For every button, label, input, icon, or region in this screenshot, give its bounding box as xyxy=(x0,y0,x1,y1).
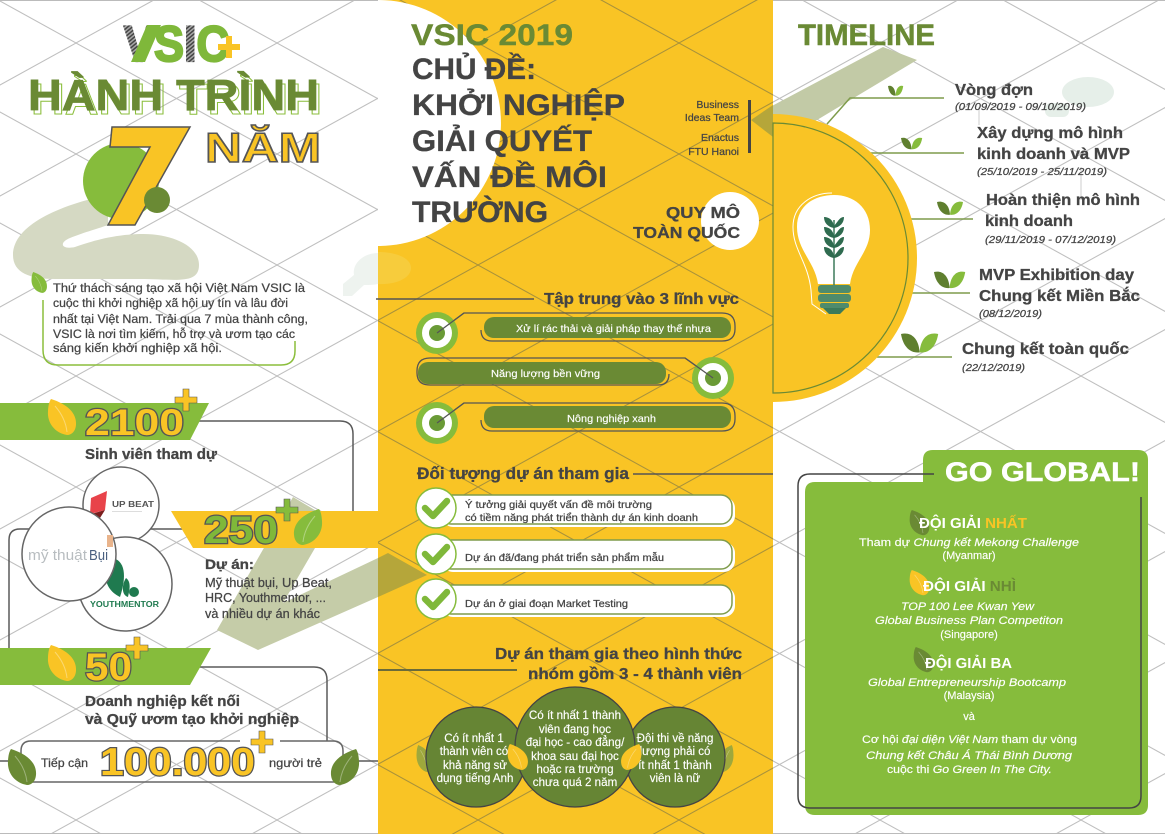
icon: yellow leaf xyxy=(48,645,76,681)
requirement circle left: khả năng sử xyxy=(443,760,507,772)
first prize xyxy=(859,510,1079,562)
heading: Timeline: TIMELINE xyxy=(798,19,935,52)
timeline connector lines xyxy=(827,98,973,357)
project logos xyxy=(22,467,172,631)
title block xyxy=(28,16,322,225)
eligibility item 2 xyxy=(416,534,735,574)
requirement circle right: Đội thi về năng xyxy=(637,733,713,745)
heading: Dự án tham gia theo hình thức xyxy=(495,646,742,663)
caption: Doanh nghiệp kết nối xyxy=(85,694,240,710)
outlined box xyxy=(21,741,343,782)
timeline step 1 xyxy=(888,82,1086,113)
caption xyxy=(85,694,299,728)
organiser names: Business xyxy=(696,99,739,111)
olive triangle of seven shape on yellow xyxy=(378,553,427,597)
olive triangle of timeline band on yellow xyxy=(751,105,773,137)
national scale badge: TOÀN QUỐC xyxy=(633,222,740,242)
intro paragraph xyxy=(53,281,308,355)
organiser names xyxy=(685,99,739,158)
requirement circle middle: viên đang học xyxy=(539,723,611,736)
timeline step 1: (01/09/2019 - 09/10/2019) xyxy=(955,102,1086,113)
VSIC logo: VSIC xyxy=(124,16,229,72)
panel outline xyxy=(798,474,1141,808)
label: người trẻ: người trẻ xyxy=(269,756,322,770)
number 100.000: 100.000 xyxy=(100,741,255,784)
project caption: Mỹ thuật bụi, Up Beat, xyxy=(205,576,332,590)
logo: Mỹ thuật Bụi: Bụi xyxy=(89,547,108,564)
project caption xyxy=(205,556,332,621)
requirement circle middle: đại học - cao đẳng/ xyxy=(526,736,625,749)
requirement circle middle: chưa quá 2 năm xyxy=(533,776,617,789)
icon: light bulb with plant xyxy=(793,193,870,314)
heading: Tập trung vào 3 lĩnh vực xyxy=(544,291,739,308)
additional opportunity: và xyxy=(963,711,976,723)
ghost bulb right xyxy=(979,77,1114,200)
icon: inner yellow leaves xyxy=(508,744,641,770)
timeline step 2: (25/10/2019 - 25/11/2019) xyxy=(977,167,1107,178)
timeline step 3: kinh doanh xyxy=(985,213,1073,230)
first prize: ĐỘI GIẢI NHẤT xyxy=(919,514,1027,532)
heading: Năm: NĂM xyxy=(205,124,321,171)
heading: VSIC 2019 theme: VSIC 2019 xyxy=(411,19,573,52)
focus item 2 xyxy=(417,357,734,399)
connector lines of left column xyxy=(0,421,378,761)
requirement circle right: lượng phải có xyxy=(640,746,710,758)
timeline step 3: Hoàn thiện mô hình xyxy=(986,192,1140,209)
big number seven xyxy=(108,127,190,225)
timeline entries xyxy=(888,82,1140,374)
timeline step 4 xyxy=(934,267,1140,320)
national scale badge xyxy=(633,192,759,250)
ghost bulb left xyxy=(343,252,411,296)
icon: right leaf xyxy=(331,749,359,785)
timeline step 4: Chung kết Miền Bắc xyxy=(979,286,1140,305)
requirement circle middle: Có ít nhất 1 thành xyxy=(529,709,621,722)
label: Tiếp cận: Tiếp cận xyxy=(41,756,88,770)
third prize xyxy=(868,647,1066,702)
eligibility item 1: có tiềm năng phát triển thành dự án kinh doanh xyxy=(465,512,698,524)
plus sign xyxy=(175,389,197,411)
heading: VSIC 2019 theme: KHỞI NGHIỆP xyxy=(412,88,625,122)
additional opportunity: Chung kết Châu Á Thái Bình Dương xyxy=(866,749,1073,762)
timeline step 4: (08/12/2019) xyxy=(979,309,1042,320)
sage decorative S curve xyxy=(13,195,199,280)
organiser names: Enactus xyxy=(701,132,739,144)
focus item 3: Nông nghiệp xanh xyxy=(567,413,656,425)
timeline step 3: (29/11/2019 - 07/12/2019) xyxy=(985,235,1116,246)
heading: VSIC 2019 theme: GIẢI QUYẾT xyxy=(412,124,592,158)
logo: Youthmentor xyxy=(78,537,172,631)
eligibility item 3 xyxy=(416,579,735,619)
sage band behind timeline xyxy=(770,47,917,137)
number 2100: 2100 xyxy=(85,402,184,443)
logo: Up Beat: UP BEAT xyxy=(112,500,154,509)
intro paragraph: cuộc thi khởi nghiệp xã hội uy tín và lâu đời xyxy=(53,296,288,310)
timeline step 5: (22/12/2019) xyxy=(962,363,1025,374)
additional opportunity: cuộc thi Go Green In The City. xyxy=(887,764,1052,776)
eligibility item 3: Dự án ở giai đoạn Market Testing xyxy=(465,598,628,610)
logo: Mỹ thuật Bụi xyxy=(22,507,116,601)
eligibility item 2: Dự án đã/đang phát triển sản phẩm mẫu xyxy=(465,551,664,564)
green ribbon xyxy=(0,403,209,440)
additional opportunity xyxy=(862,711,1077,776)
requirement circle left: Có ít nhất 1 xyxy=(444,733,504,745)
timeline step 5 xyxy=(901,334,1129,374)
second prize: (Singapore) xyxy=(940,629,998,641)
requirement circle middle xyxy=(515,687,635,807)
requirement circle right: ít nhất 1 thành xyxy=(638,760,712,772)
icon: green leaf xyxy=(294,509,322,545)
panel: Go Global xyxy=(798,450,1148,815)
third prize: Global Entrepreneurship Bootcamp xyxy=(868,677,1066,689)
requirement circle middle: khoa sau đại học xyxy=(531,750,619,763)
timeline step 5: Chung kết toàn quốc xyxy=(962,341,1129,358)
heading: VSIC 2019 theme: VẤN ĐỀ MÔI xyxy=(412,160,607,194)
eligibility item 1 xyxy=(416,488,735,528)
national scale badge: QUY MÔ xyxy=(666,203,740,222)
organisers xyxy=(685,99,751,158)
intro text box xyxy=(32,272,308,365)
stat: 50 businesses xyxy=(0,637,299,728)
icon: intro leaf xyxy=(32,272,47,293)
icon: outer leaves xyxy=(417,745,733,772)
section: eligible projects xyxy=(416,464,773,619)
timeline yellow half circle xyxy=(773,114,917,402)
plus sign xyxy=(251,731,273,753)
second prize xyxy=(875,570,1063,641)
timeline step 4: MVP Exhibition day xyxy=(979,267,1134,284)
timeline step 1: Vòng đợn xyxy=(955,82,1033,99)
logo: Mỹ thuật Bụi: mỹ thuật xyxy=(28,547,88,564)
requirement circle left xyxy=(426,707,526,807)
second prize: Global Business Plan Competiton xyxy=(875,615,1063,627)
requirement circle middle: hoặc ra trường xyxy=(536,763,614,776)
requirement circle right xyxy=(625,707,725,807)
green circle accent xyxy=(83,143,159,219)
first prize: Tham dự Chung kết Mekong Challenge xyxy=(859,537,1079,549)
heading: GO GLOBAL! xyxy=(945,457,1140,487)
intro paragraph: sáng kiến khởi nghiệp xã hội. xyxy=(53,341,222,355)
heading: Đối tượng dự án tham gia xyxy=(417,464,630,483)
timeline step 2 xyxy=(901,125,1130,178)
stat: 2100 students xyxy=(0,389,218,463)
caption: và Quỹ ươm tạo khởi nghiệp xyxy=(85,712,299,728)
second prize: ĐỘI GIẢI NHÌ xyxy=(923,577,1016,595)
stat: reach 100000 young people xyxy=(8,731,359,785)
requirement circle right: viên là nữ xyxy=(650,773,701,785)
caption: Sinh viên tham dự xyxy=(85,447,218,463)
intro paragraph: Thứ thách sáng tạo xã hội Việt Nam VSIC là xyxy=(53,281,305,295)
first prize: (Myanmar) xyxy=(942,550,996,562)
stat: 250 projects xyxy=(171,499,378,621)
additional opportunity: Cơ hội đại diện Việt Nam tham dự vòng xyxy=(862,734,1077,746)
focus item 3 xyxy=(416,402,735,444)
green ribbon xyxy=(0,648,211,685)
focus item 1: Xử lí rác thải và giải pháp thay thế nhựa xyxy=(516,323,711,335)
timeline step 2: kinh doanh và MVP xyxy=(977,146,1130,163)
number 50: 50 xyxy=(85,646,132,689)
heading: nhóm gồm 3 - 4 thành viên xyxy=(528,666,742,683)
timeline step 3 xyxy=(937,192,1140,246)
requirement circle left: thành viên có xyxy=(440,746,508,758)
heading: VSIC 2019 theme xyxy=(411,19,625,229)
project caption: và nhiều dự án khác xyxy=(205,607,320,621)
focus item 1 xyxy=(416,312,735,354)
third prize: ĐỘI GIẢI BA xyxy=(925,654,1013,672)
eligibility item 1: Ý tưởng giải quyết vấn đề môi trường xyxy=(465,498,652,511)
section: team requirements xyxy=(378,646,742,807)
logo: Up Beat xyxy=(83,467,159,543)
intro paragraph: nhất tại Việt Nam. Trải qua 7 mùa thành công, xyxy=(53,312,308,326)
section: three focus areas xyxy=(376,291,739,444)
timeline step 2: Xây dựng mô hình xyxy=(977,125,1123,142)
organiser names: Ideas Team xyxy=(685,112,739,124)
panel: yellow centre column xyxy=(378,0,773,834)
requirement circle left: dụng tiếng Anh xyxy=(437,773,513,785)
white circle behind theme heading xyxy=(378,0,501,246)
second prize: TOP 100 Lee Kwan Yew xyxy=(901,601,1035,613)
plus sign xyxy=(126,637,148,659)
icon: yellow leaf xyxy=(48,399,76,435)
third prize: (Malaysia) xyxy=(944,690,994,702)
sage seven shape behind project stats xyxy=(217,497,378,650)
dark green dot xyxy=(144,187,170,213)
project caption: Dự án: xyxy=(205,556,254,572)
number 250: 250 xyxy=(204,509,278,552)
heading xyxy=(495,646,742,683)
intro paragraph: VSIC là nơi tìm kiếm, hỗ trợ và ươm tạo các xyxy=(53,326,295,341)
logo: Youthmentor: YOUTHMENTOR xyxy=(90,600,159,609)
heading: Hành trình: HÀNH TRÌNH xyxy=(28,70,319,120)
panel background with tab xyxy=(805,450,1148,815)
heading: VSIC 2019 theme: TRƯỜNG xyxy=(412,195,548,229)
heading: VSIC 2019 theme: CHỦ ĐỀ: xyxy=(412,52,536,86)
organiser bar xyxy=(748,100,751,153)
icon: left leaf xyxy=(8,749,36,785)
plus sign xyxy=(276,499,298,521)
organiser names: FTU Hanoi xyxy=(688,146,739,158)
project caption: HRC, Youthmentor, ... xyxy=(205,591,326,605)
intro box outline xyxy=(43,300,295,365)
focus item 2: Năng lượng bền vững xyxy=(491,368,600,380)
heading: Hành trình: HÀNH TRÌNH xyxy=(31,74,322,124)
yellow ribbon xyxy=(171,511,378,548)
